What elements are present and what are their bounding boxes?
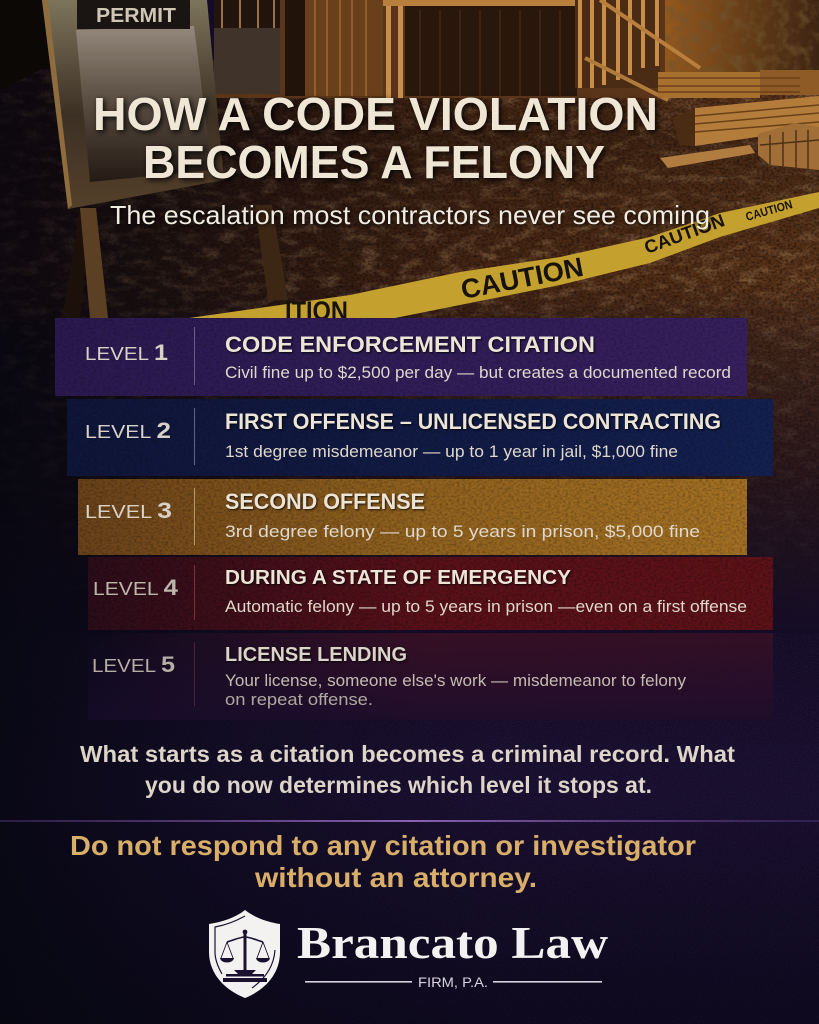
lumber stacks xyxy=(658,70,819,170)
description: 3rd degree felony — up to 5 years in prison, $5,000 fine xyxy=(225,522,700,541)
level label: LEVEL 4 xyxy=(93,575,179,600)
logo: Brancato Law xyxy=(209,910,608,998)
dark left backdrop xyxy=(0,0,90,90)
forest xyxy=(655,0,819,78)
heading: SECOND OFFENSE xyxy=(225,489,425,514)
icon: shield with scales xyxy=(209,910,280,998)
dirt ground xyxy=(0,60,819,632)
summary statement xyxy=(80,741,735,798)
panel: level 5 xyxy=(88,633,773,720)
description xyxy=(225,671,687,709)
firm subtitle: FIRM, P.A. xyxy=(418,974,488,990)
house under construction xyxy=(214,0,700,100)
level label: LEVEL 1 xyxy=(85,340,168,365)
panel: level 3 xyxy=(78,479,747,555)
heading: DURING A STATE OF EMERGENCY xyxy=(225,567,572,589)
description: Civil fine up to $2,500 per day — but creates a documented record xyxy=(225,363,731,382)
tape text: CAUTION xyxy=(744,197,794,224)
level label: LEVEL 5 xyxy=(92,652,175,677)
title: BECOMES A FELONY xyxy=(143,136,605,188)
panel: level 1 xyxy=(55,318,747,396)
tape text xyxy=(285,197,794,326)
call to action: Do not respond to any citation or investigator xyxy=(70,830,696,861)
title: HOW A CODE VIOLATION xyxy=(93,88,658,140)
tape text: CAUTION xyxy=(642,210,727,258)
permit sign board xyxy=(42,0,224,209)
heading: LICENSE LENDING xyxy=(225,644,407,666)
description: Automatic felony — up to 5 years in prison —even on a first offense xyxy=(225,597,747,616)
heading: FIRST OFFENSE – UNLICENSED CONTRACTING xyxy=(225,409,721,434)
call to action: without an attorney. xyxy=(254,862,537,893)
heading: CODE ENFORCEMENT CITATION xyxy=(225,332,595,357)
call to action xyxy=(70,830,696,893)
permit sign legs xyxy=(62,205,288,318)
description: Your license, someone else's work — misdemeanor to felony xyxy=(225,671,687,690)
summary statement: What starts as a citation becomes a criminal record. What xyxy=(80,741,735,767)
description: 1st degree misdemeanor — up to 1 year in jail, $1,000 fine xyxy=(225,442,678,461)
description: on repeat offense. xyxy=(225,690,373,709)
tape text: ITION xyxy=(285,296,348,326)
panel: level 2 xyxy=(67,399,773,476)
subtitle: The escalation most contractors never see coming xyxy=(110,200,710,230)
level label: LEVEL 3 xyxy=(85,498,172,523)
permit label: PERMIT xyxy=(96,5,176,27)
panel: level 4 xyxy=(88,557,773,630)
caution tape xyxy=(175,192,819,326)
summary statement: you do now determines which level it stops at. xyxy=(145,772,652,798)
level label: LEVEL 2 xyxy=(85,418,171,443)
firm name: Brancato Law xyxy=(297,917,608,968)
tape text: CAUTION xyxy=(458,252,586,305)
title xyxy=(93,88,658,188)
